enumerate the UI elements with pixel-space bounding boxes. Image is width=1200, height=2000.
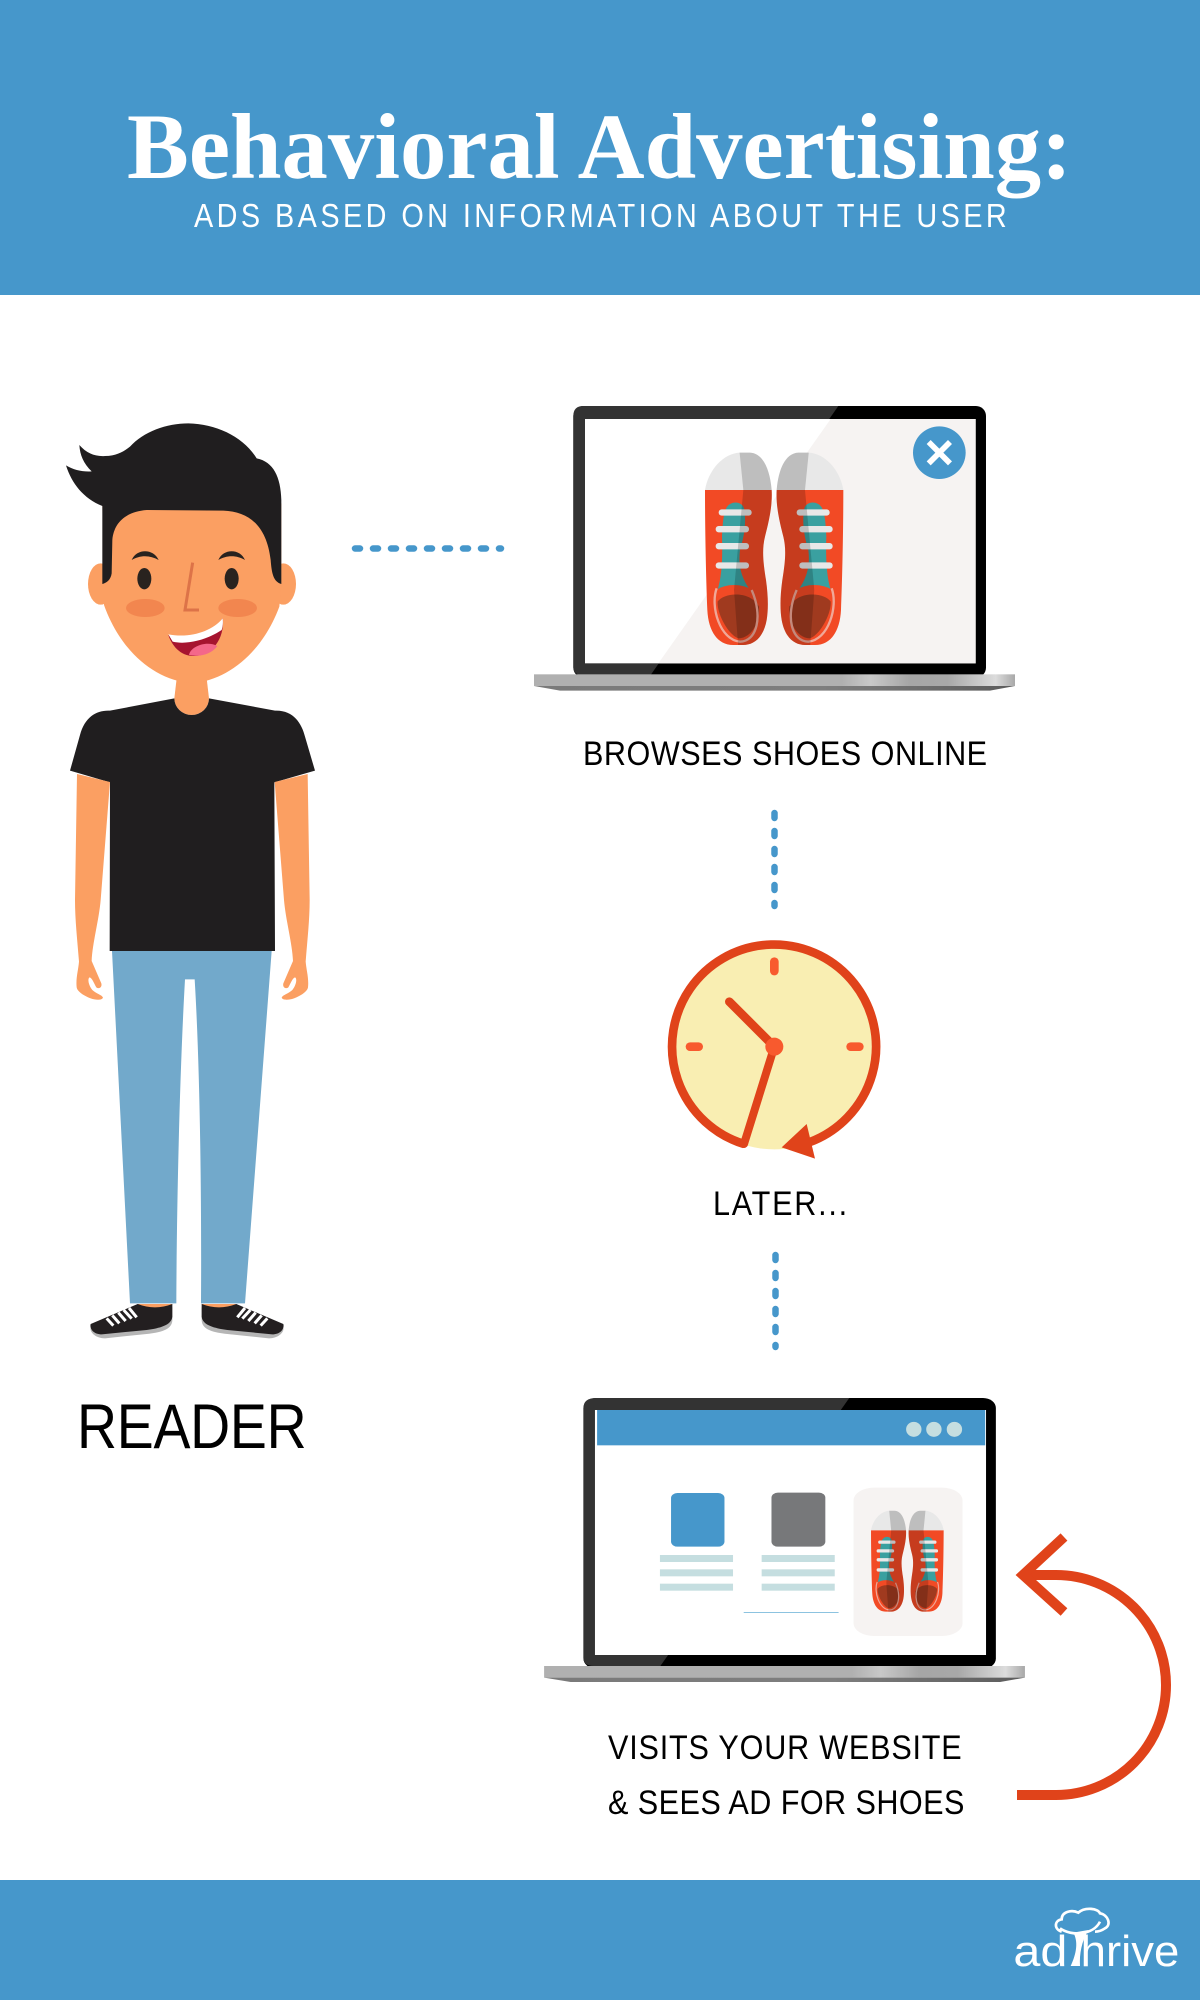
nose: [185, 563, 199, 610]
ad panel: [854, 1488, 963, 1636]
adthrive logo: hrive: [1081, 1928, 1179, 1976]
content card: gray: [744, 1493, 839, 1613]
caption: later: LATER...: [713, 1185, 847, 1222]
laptop bezel: [583, 1398, 996, 1669]
neck: [174, 678, 209, 715]
adthrive logo: ad: [1013, 1928, 1067, 1976]
reader label: READER: [77, 1391, 307, 1462]
mouth: [168, 618, 223, 656]
content card: blue: [660, 1493, 733, 1591]
subtitle: ADS BASED ON INFORMATION ABOUT THE USER: [194, 197, 1007, 235]
cheeks: [126, 599, 257, 617]
footer band: [0, 1880, 1200, 2000]
ad shoes image: [871, 1511, 944, 1612]
header band: [0, 0, 1200, 295]
face: [102, 503, 281, 683]
laptop: browsing shoes: [534, 406, 1015, 691]
ears: [88, 563, 296, 605]
laptop: website with ad: [544, 1398, 1025, 1682]
character legs and arms: [75, 774, 310, 1338]
return arrow: [1017, 1537, 1166, 1795]
left arm: [75, 774, 110, 1000]
right shoe: [202, 1304, 284, 1338]
close icon: [913, 426, 966, 479]
character: reader: [66, 423, 315, 1338]
hair: [66, 423, 281, 584]
dotted connector: laptop to clock: [771, 813, 778, 906]
caption: visits website: VISITS YOUR WEBSITE: [608, 1729, 962, 1766]
dotted connector: reader to laptop: [355, 545, 501, 552]
dotted connector: clock to laptop: [772, 1255, 779, 1347]
adthrive logo: [1013, 1909, 1179, 1976]
laptop base: [534, 674, 1015, 691]
laptop screen: [585, 419, 976, 663]
caption: visits website: & SEES AD FOR SHOES: [608, 1784, 964, 1821]
pants: [112, 951, 272, 1303]
browser bar: [597, 1410, 985, 1445]
title: Behavioral Advertising:: [127, 96, 1072, 199]
shoes image: [705, 453, 843, 645]
left shoe: [90, 1304, 172, 1338]
shirt: [70, 698, 315, 951]
character head and torso: [66, 423, 315, 951]
laptop bezel: [573, 406, 986, 678]
clock icon: [672, 944, 877, 1159]
laptop screen: [595, 1410, 986, 1655]
caption: visits website: [608, 1729, 964, 1821]
right arm: [275, 774, 310, 1000]
caption: browses shoes: BROWSES SHOES ONLINE: [583, 735, 987, 772]
laptop base: [544, 1666, 1025, 1682]
eyes and brows: [132, 551, 245, 589]
